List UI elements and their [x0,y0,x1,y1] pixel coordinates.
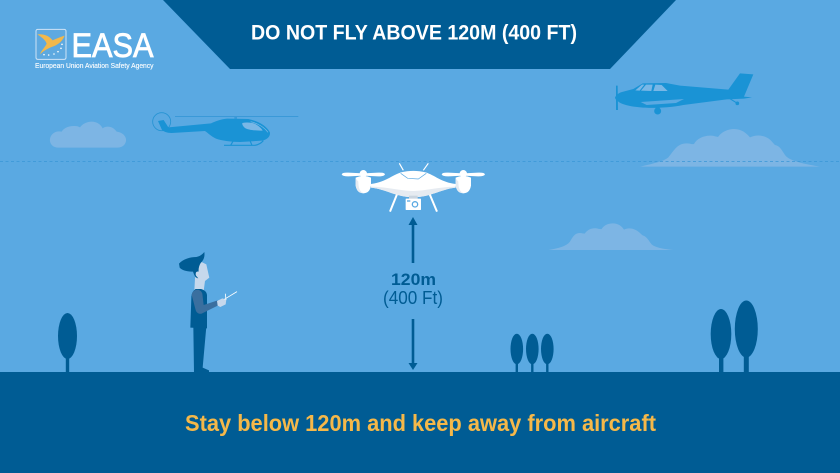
legs [193,327,209,372]
drone [342,163,485,212]
cockpit windows [635,85,668,91]
hair [179,252,204,278]
drone body [371,171,456,197]
right rotor [442,170,485,193]
top panel line [401,173,426,179]
arm [192,290,219,314]
neck and face [194,260,209,291]
propeller [616,86,618,110]
tree: left [58,313,77,373]
hand [217,298,226,307]
fuselage [158,119,270,142]
camera [406,196,421,210]
altitude metres label: 120m [391,271,436,289]
fuselage [615,73,753,108]
tree group: centre [510,334,554,373]
title banner [163,0,676,69]
helicopter [153,113,298,145]
body shading [371,187,456,197]
antennas [399,163,428,170]
altitude feet label: (400 Ft) [383,288,443,308]
landing legs [390,191,437,212]
tail rotor [153,113,171,131]
ground band [0,372,840,473]
banner shape [163,0,676,69]
banner heading: DO NOT FLY ABOVE 120M (400 FT) [251,22,577,44]
main rotor [175,116,298,120]
altitude measure [383,217,443,370]
down arrow [408,319,418,370]
wing highlight [641,99,684,105]
airplane [615,73,753,114]
cockpit front outline [251,122,268,132]
landing gear [654,98,739,114]
logo square with bird icon [36,29,66,59]
torso [190,289,207,328]
EASA logo [35,27,154,70]
cloud: upper right [640,129,820,167]
landing skid [224,141,263,145]
cloud: middle right [548,223,673,250]
person with remote controller [179,252,237,372]
bottom message: Stay below 120m and keep away from aircraft [185,410,656,436]
up arrow [408,217,418,263]
cloud: upper left [50,122,126,148]
left rotor [342,170,385,193]
cockpit window [242,123,263,131]
tree group: right [711,300,758,373]
altitude limit dashed line [0,160,840,162]
logo tagline: European Union Aviation Safety Agency [35,61,154,70]
controller [224,292,237,300]
logo wordmark: EASA [72,27,154,65]
